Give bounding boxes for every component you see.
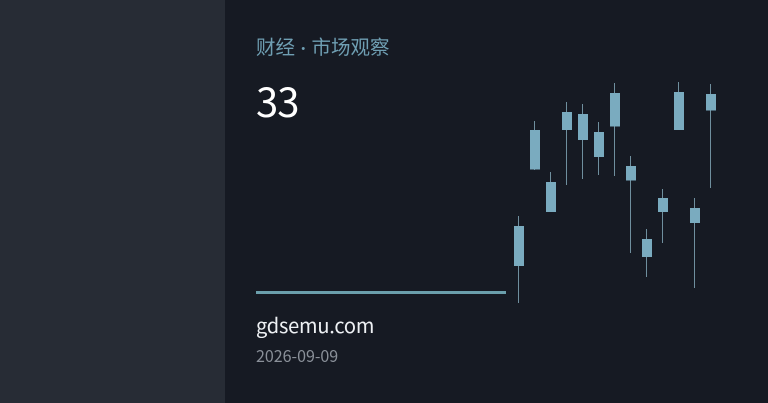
- accent rule: [256, 291, 506, 294]
- big number title: 33: [256, 71, 298, 129]
- category heading: 财经 市场观察: [256, 31, 390, 60]
- site name: gdsemu.com: [256, 310, 374, 339]
- date: 2026-09-09: [256, 343, 338, 367]
- panel: left sidebar: [0, 0, 225, 403]
- category heading: ·: [296, 39, 310, 59]
